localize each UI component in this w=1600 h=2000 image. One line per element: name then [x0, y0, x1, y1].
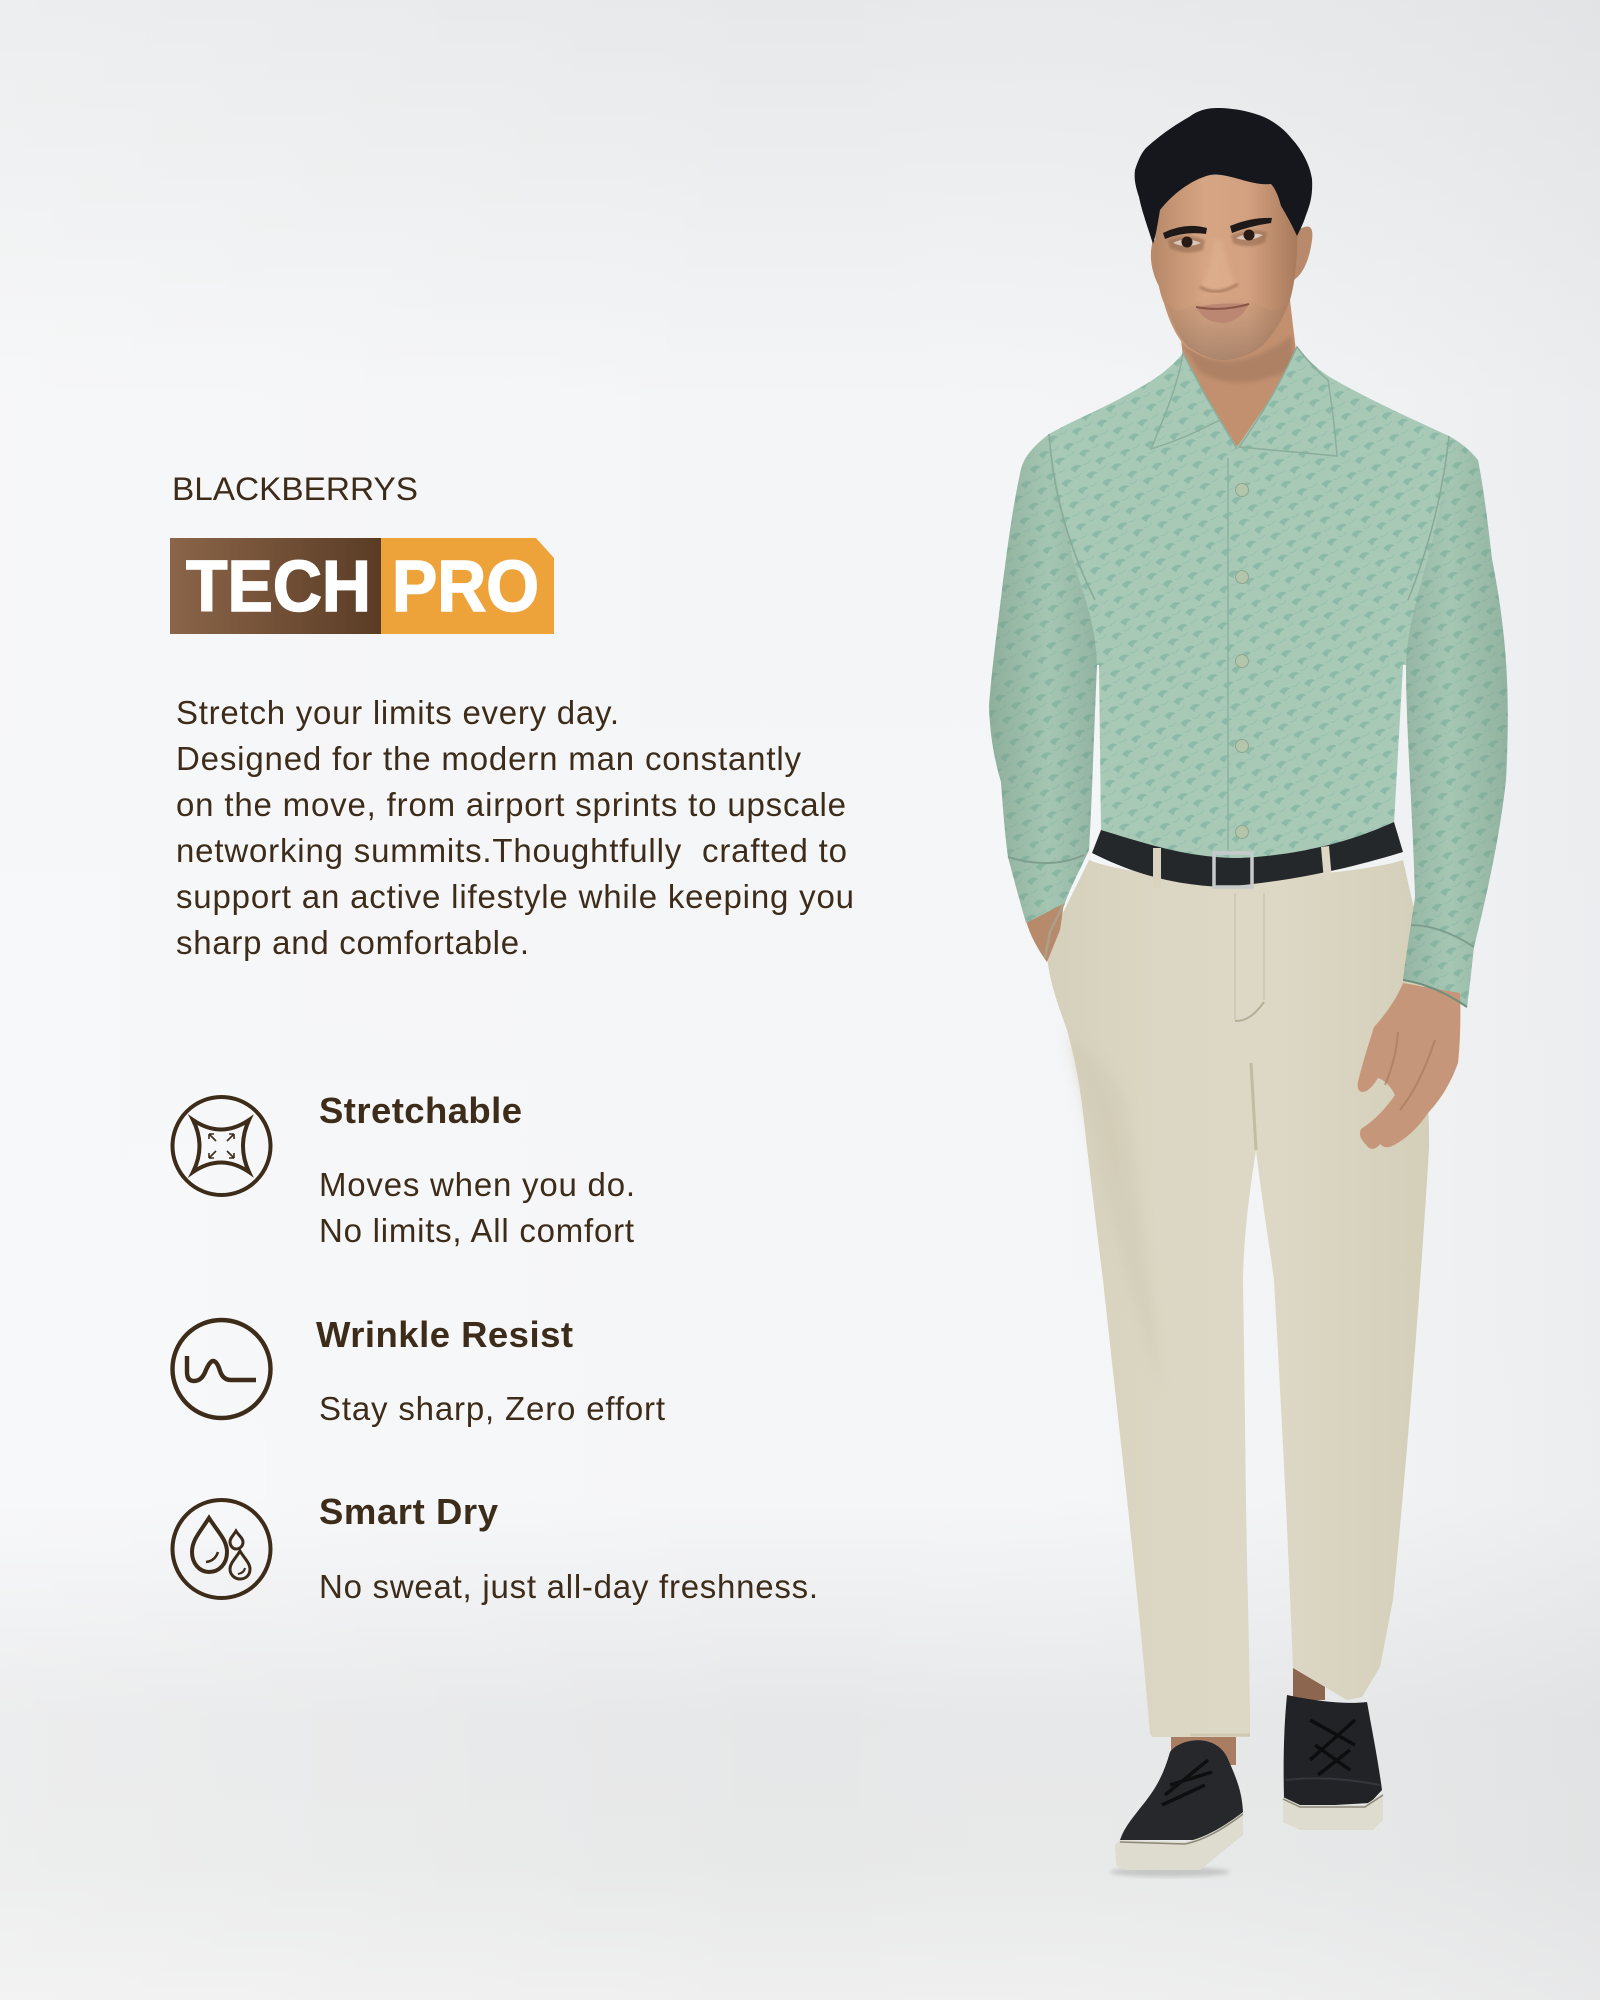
icon: wrinkle line — [172, 1320, 270, 1418]
trousers — [1047, 860, 1429, 1737]
model photo illustration — [989, 108, 1508, 1877]
icon: water drops — [172, 1500, 270, 1598]
feature: Stretchable: No limits, All comfort — [319, 1212, 634, 1249]
feature: Stretchable: Stretchable — [319, 1090, 522, 1131]
nose — [1200, 240, 1238, 291]
feature: Wrinkle Resist — [172, 1314, 665, 1427]
intro paragraph: Designed for the modern man constantly — [176, 740, 802, 777]
eyes — [1168, 230, 1267, 253]
feature: Wrinkle Resist: Wrinkle Resist — [316, 1314, 573, 1355]
pocket edge — [1045, 903, 1064, 958]
right shoe — [1283, 1695, 1383, 1830]
feature: Stretchable: Moves when you do. — [319, 1166, 635, 1203]
left shoe — [1115, 1740, 1243, 1870]
shirt buttons — [1236, 484, 1248, 838]
ears — [1151, 227, 1312, 292]
neck — [1177, 300, 1297, 447]
logo: Tech Pro badge: TECH — [186, 547, 371, 627]
hair — [1135, 108, 1312, 244]
feature: Smart Dry: No sweat, just all-day freshness. — [319, 1568, 818, 1605]
logo: Tech Pro badge: PRO — [392, 547, 539, 627]
right hand — [1358, 983, 1460, 1149]
intro paragraph: networking summits.Thoughtfully crafted to — [176, 832, 847, 869]
feature: Stretchable — [172, 1090, 635, 1249]
intro paragraph — [176, 694, 854, 961]
right cuff shadow line — [1403, 980, 1467, 1007]
feature: Wrinkle Resist: Stay sharp, Zero effort — [319, 1390, 665, 1427]
intro paragraph: Stretch your limits every day. — [176, 694, 619, 731]
floor shadow — [1110, 1867, 1230, 1877]
feature: Smart Dry: Smart Dry — [319, 1491, 499, 1532]
logo: Tech Pro badge — [170, 538, 554, 634]
feature: Smart Dry — [172, 1491, 818, 1605]
right ankle — [1293, 1668, 1325, 1700]
intro paragraph: on the move, from airport sprints to upscale — [176, 786, 846, 823]
stubble — [1166, 296, 1288, 360]
intro paragraph: sharp and comfortable. — [176, 924, 529, 961]
neck shadow — [1180, 335, 1294, 383]
face — [1155, 175, 1297, 360]
intro paragraph: support an active lifestyle while keeping you — [176, 878, 854, 915]
mouth — [1196, 303, 1249, 323]
left ankle — [1171, 1735, 1236, 1765]
collar — [1151, 347, 1337, 456]
belt — [1092, 822, 1403, 888]
brand name: BLACKBERRYS — [172, 471, 418, 507]
hand in pocket — [1026, 903, 1064, 962]
icon: stretch fabric — [172, 1097, 270, 1195]
eyebrows — [1163, 218, 1272, 239]
shirt — [989, 347, 1508, 1007]
